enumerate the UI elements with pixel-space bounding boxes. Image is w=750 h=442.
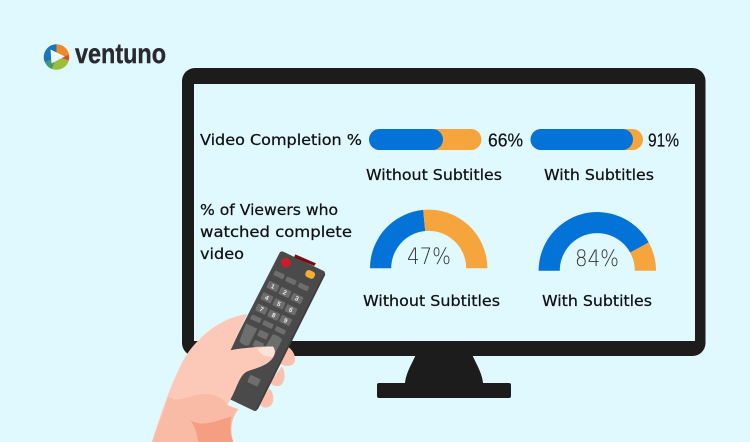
row label: viewers who watched: % of Viewers who bbox=[200, 201, 338, 219]
yellow button bbox=[304, 269, 316, 280]
logo: ventuno bbox=[44, 38, 166, 70]
remote control bbox=[213, 254, 324, 408]
bar: with subtitles 91% bbox=[530, 129, 679, 150]
gauge: without subtitles 47% bbox=[370, 210, 487, 270]
bar caption: with subtitles: With Subtitles bbox=[544, 166, 654, 184]
tv bezel bbox=[182, 68, 706, 356]
remote key numbers: 3 bbox=[294, 295, 300, 303]
thumb bbox=[212, 346, 275, 374]
remote key numbers: 8 bbox=[270, 312, 277, 320]
tv screen bbox=[194, 84, 695, 341]
remote body bbox=[213, 254, 322, 408]
bar caption: without subtitles: Without Subtitles bbox=[366, 166, 502, 184]
power button bbox=[281, 258, 291, 268]
remote key numbers: 1 bbox=[270, 283, 276, 291]
wrist shadow bbox=[190, 417, 233, 442]
hand holding remote bbox=[152, 254, 324, 442]
remote edge shade bbox=[257, 275, 324, 408]
gauge caption: without subtitles: Without Subtitles bbox=[363, 292, 500, 310]
bar: with subtitles 91%: 91% bbox=[648, 130, 679, 150]
hand fingers behind remote bbox=[259, 346, 295, 408]
remote ir window bbox=[294, 254, 316, 266]
hand shadow bbox=[152, 394, 238, 442]
bar: without subtitles 66%: 66% bbox=[488, 130, 523, 150]
remote key numbers: 6 bbox=[288, 307, 294, 315]
icon: play logo bbox=[44, 44, 69, 70]
remote key numbers: 7 bbox=[258, 306, 265, 314]
row label: viewers who watched: watched complete bbox=[200, 223, 352, 241]
row label: viewers who watched: video bbox=[200, 245, 244, 263]
hand palm bbox=[152, 314, 247, 442]
gauge: without subtitles 47%: 47% bbox=[407, 245, 451, 270]
row label: viewers who watched bbox=[200, 201, 352, 263]
remote key numbers bbox=[258, 283, 300, 325]
gauge: with subtitles 84% bbox=[539, 212, 656, 272]
remote key numbers: 5 bbox=[276, 301, 282, 309]
remote key numbers: 2 bbox=[282, 289, 288, 297]
row label: video completion: Video Completion % bbox=[200, 131, 362, 149]
gauge: with subtitles 84%: 84% bbox=[575, 247, 619, 272]
thumbnail bbox=[257, 347, 275, 357]
remote key numbers: 9 bbox=[282, 317, 289, 325]
wordmark: ventuno bbox=[75, 38, 166, 69]
gauge caption: with subtitles: With Subtitles bbox=[542, 292, 652, 310]
tv stand bbox=[377, 350, 511, 398]
bar: without subtitles 66% bbox=[369, 129, 523, 150]
remote keypad bbox=[239, 270, 309, 387]
remote key numbers: 4 bbox=[264, 295, 270, 303]
tv monitor bbox=[182, 68, 706, 398]
